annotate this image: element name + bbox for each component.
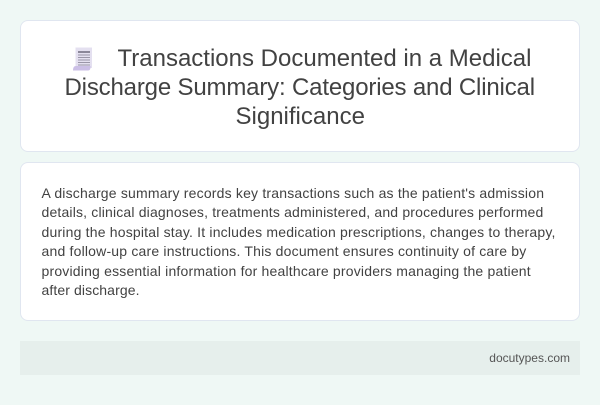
panel: description card — [20, 162, 580, 321]
panel: description card: and follow-up care instructions. This document ensures continuity of care by — [42, 243, 526, 259]
panel: title card: Significance — [236, 103, 365, 130]
panel: description card: details, clinical diagnoses, treatments administered, and procedures performed — [42, 204, 543, 220]
panel: description card: after discharge. — [42, 282, 140, 298]
panel: description card: during the hospital stay. It includes medication prescriptions, changes to therapy, — [42, 224, 556, 240]
panel: description card: A discharge summary records key transactions such as the patient's admission — [42, 185, 544, 201]
panel: title card: Transactions Documented in a Medical — [118, 45, 531, 72]
panel: title card — [20, 20, 580, 152]
panel: title card: Discharge Summary: Categories and Clinical — [64, 74, 535, 101]
footer bar — [20, 341, 580, 375]
footer text: docutypes.com — [489, 351, 570, 365]
icon: document receipt — [73, 48, 92, 70]
heading — [64, 45, 535, 130]
panel: description card: providing essential information for healthcare providers managing the patient — [42, 263, 531, 279]
text block: description — [42, 185, 556, 298]
